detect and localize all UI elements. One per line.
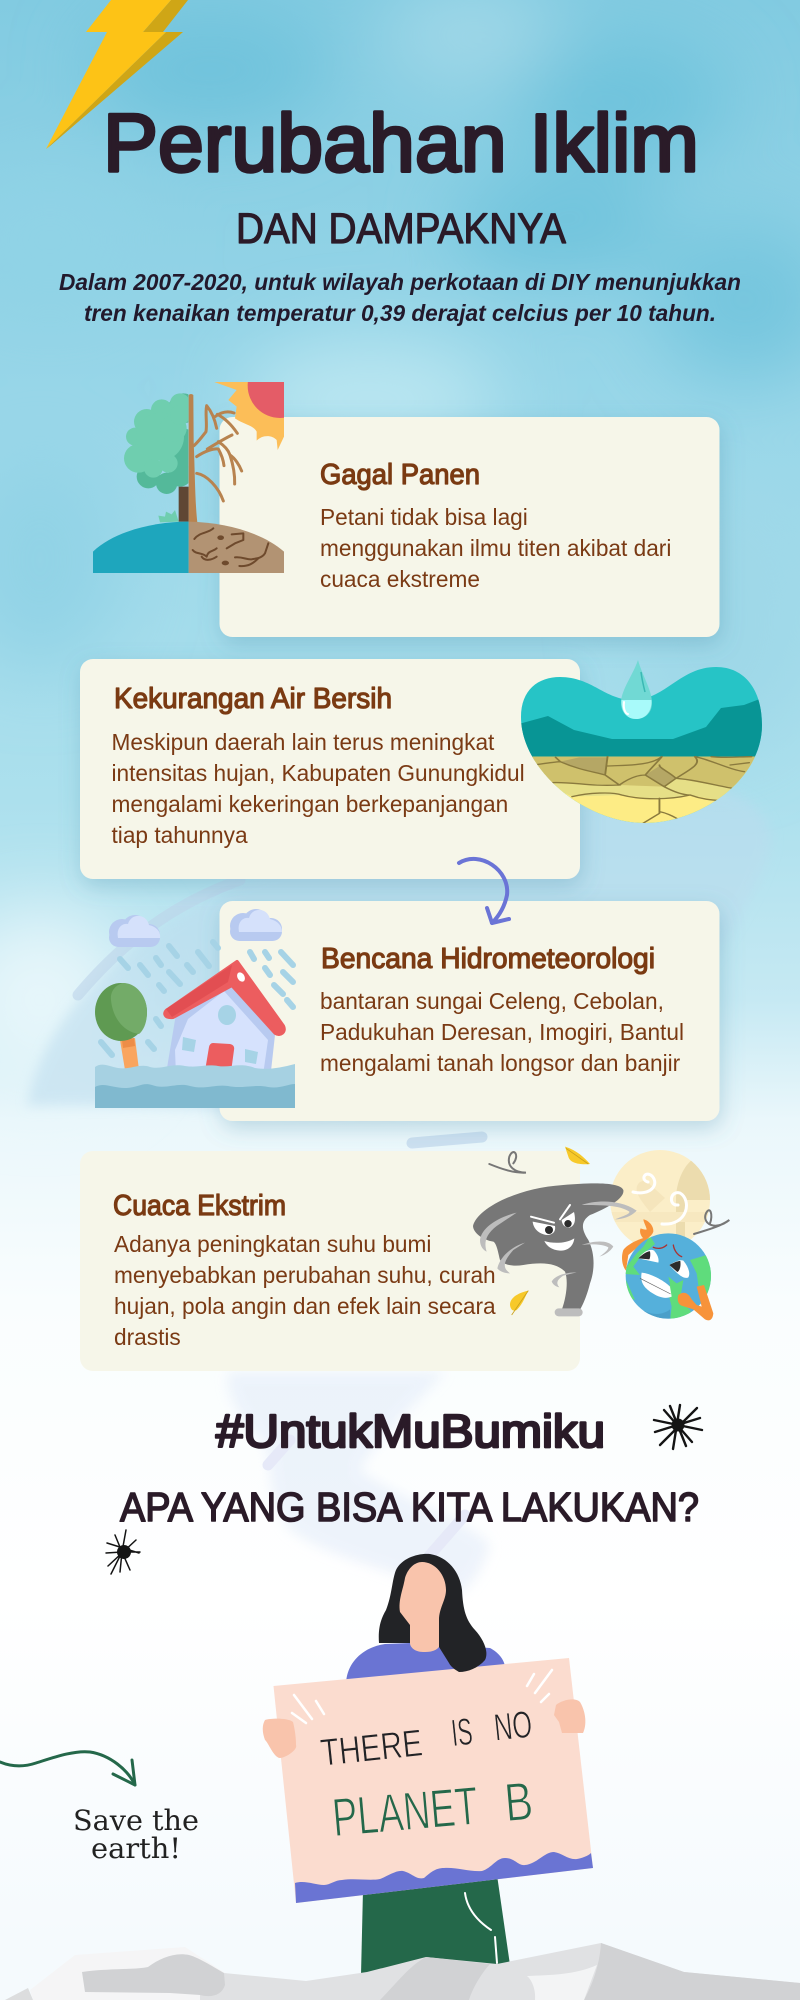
intro text: Dalam 2007-2020, untuk wilayah perkotaan di DIY menunjukkan [59,269,741,295]
text: kekurangan air bersih: Meskipun daerah lain terus meningkat [112,729,495,755]
text: save the earth: Save the [73,1804,199,1837]
panel: kekurangan air bersih [80,659,580,879]
illustration: grey rocks [5,1943,800,2000]
sign board [274,1658,593,1903]
question heading: APA YANG BISA KITA LAKUKAN? [120,1484,699,1530]
icon: rain drops [101,942,293,1055]
icon: tornado, leaves and worried earth [473,1147,729,1322]
text: cuaca ekstrim [114,1231,496,1350]
arrow: green wavy [0,1752,135,1785]
icon: ink splat [106,1530,140,1574]
text: gagal panen [320,504,671,592]
icon: leaves [510,1147,590,1315]
illustration: woman holding sign [263,1554,593,1975]
text: kekurangan air bersih [112,729,525,848]
sign text: there is no: IS [449,1711,475,1755]
text: bencana hidrometeorologi: bantaran sungai Celeng, Cebolan, [320,988,664,1014]
text: save the earth: earth! [91,1832,181,1865]
text: cuaca ekstrim: drastis [114,1324,181,1350]
face [400,1562,446,1652]
arrow: curved blue [459,859,509,923]
panel: gagal panen [220,417,720,637]
icon: clouds [109,909,282,947]
pants [361,1875,510,1975]
hashtag heading: #UntukMuBumiku [216,1405,605,1457]
text: gagal panen: menggunakan ilmu titen akibat dari [320,535,671,561]
icon: worried earth [622,1219,713,1322]
faint tornado swirl background [27,790,771,1596]
icon: tree [95,983,147,1070]
heading: gagal panen: Gagal Panen [320,459,480,491]
intro text [59,269,741,326]
icon: half tree half dry plant [93,382,284,573]
sign wave [295,1852,593,1903]
heading: bencana hidrometeorologi: Bencana Hidrometeorologi [321,943,655,975]
text: bencana hidrometeorologi: Padukuhan Deresan, Imogiri, Bantul [320,1019,684,1045]
text: cuaca ekstrim: menyebabkan perubahan suhu, curah [114,1262,496,1288]
text: kekurangan air bersih: tiap tahunnya [112,822,248,848]
heading: kekurangan air bersih: Kekurangan Air Bersih [114,683,392,715]
sign text: there is no: NO [492,1704,534,1750]
hands [263,1719,296,1758]
panel: bencana hidrometeorologi [220,901,720,1121]
sign text: planet b: B [502,1771,535,1833]
subtitle: DAN DAMPAKNYA [236,205,566,253]
icon: house [165,962,284,1080]
icon: tornado [473,1183,637,1316]
sign text: planet b: PLANET [330,1776,481,1848]
icon: lightning bolt [46,0,188,149]
icon: flood water [95,1064,295,1108]
panel: cuaca ekstrim [80,1151,580,1371]
title: Perubahan Iklim [103,98,699,189]
icon: tornado characters [473,1147,729,1322]
text: kekurangan air bersih: intensitas hujan, Kabupaten Gunungkidul [112,760,525,786]
shirt [346,1643,505,1685]
icon: curls [489,1152,729,1234]
text: cuaca ekstrim: Adanya peningkatan suhu bumi [114,1231,431,1257]
heading: cuaca ekstrim: Cuaca Ekstrim [113,1190,286,1222]
text: cuaca ekstrim: hujan, pola angin dan efek lain secara [114,1293,496,1319]
icon: pale sun [610,1150,712,1250]
intro text: tren kenaikan temperatur 0,39 derajat celcius per 10 tahun. [84,300,716,326]
sign text: there is no [318,1704,535,1775]
icon: flooded house in rain [95,909,295,1108]
text: gagal panen: cuaca ekstreme [320,566,480,592]
sign highlights [292,1670,552,1723]
icon: ink star [654,1405,702,1449]
text: save the earth [73,1804,199,1865]
sign text: there is no: THERE [319,1722,425,1775]
text: bencana hidrometeorologi: mengalami tanah longsor dan banjir [320,1050,681,1076]
text: bencana hidrometeorologi [320,988,684,1076]
text: gagal panen: Petani tidak bisa lagi [320,504,528,530]
icon: water over cracked earth [521,660,762,823]
text: kekurangan air bersih: mengalami kekeringan berkepanjangan [112,791,508,817]
hair [379,1554,486,1672]
